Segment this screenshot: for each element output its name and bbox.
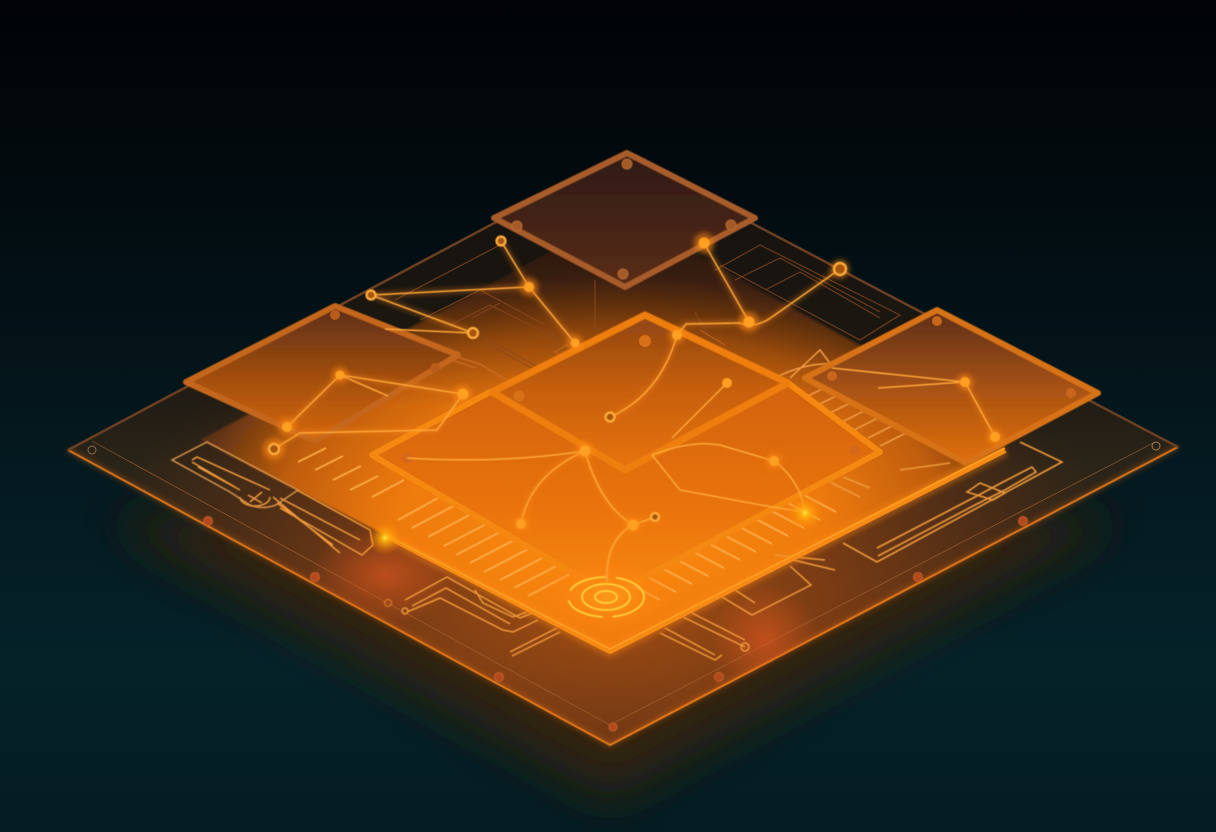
panel: left plate [186,306,458,441]
ring nodes [269,236,846,521]
bright sparks [368,495,823,555]
ground shadow under board [110,480,1120,800]
wire glow [274,241,995,582]
wires [274,241,995,582]
panel: large lower plate [372,383,880,595]
circuit fingers: left of centre [298,448,576,596]
bright rear trace under left plate [390,338,520,388]
panel: top plate [494,153,755,287]
panel: front glass lip [385,448,1005,651]
hot spots on base plate [318,532,812,676]
icon: concentric glow rings [538,557,678,637]
circuit traces: bottom right block [660,555,835,660]
circuit traces: left block [172,442,373,555]
panel: base plate [68,155,1178,745]
node glow [263,233,1003,533]
circuit traces: bottom left block [384,577,560,656]
circuit fingers: upper right [775,350,908,446]
panel: right plate [805,310,1098,463]
circuit traces: right block [830,442,1062,562]
base plate mounting holes [204,516,1028,731]
panel: centre plate [492,315,788,470]
panel: middle plate field [200,215,1005,651]
solid nodes [282,238,1000,530]
rear faint traces [395,245,900,378]
circuit fingers: right of centre [626,494,836,600]
